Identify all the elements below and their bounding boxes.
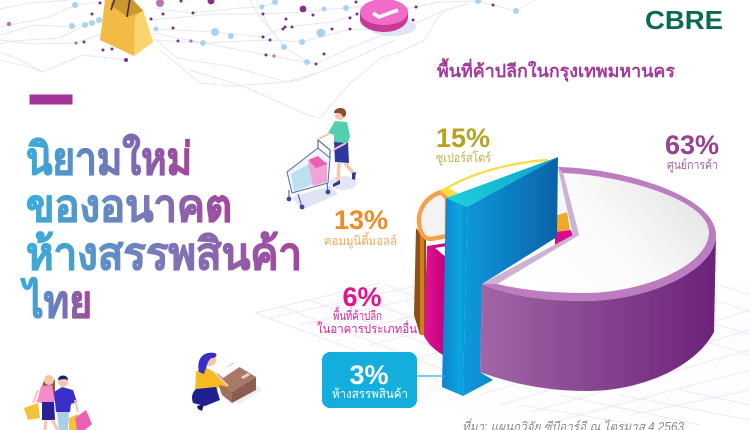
label: 13% community mall: 13% [334, 205, 388, 235]
slice: shopping centre top rim [482, 167, 716, 301]
icon: couple with shopping bags [24, 375, 92, 430]
title: ของอนาคต [26, 182, 232, 231]
pie chart [414, 157, 716, 396]
purple accent bar [30, 94, 72, 104]
title: นิยามใหม่ [26, 133, 192, 184]
label: 6% other retail: ในอาคารประเภทอื่น [317, 320, 417, 336]
label: 13% community mall: คอมมูนิตี้มอลล์ [324, 231, 397, 249]
chart heading: พื้นที่ค้าปลีกในกรุงเทพมหานคร [437, 58, 676, 82]
label: 6% other retail: 6% [342, 282, 382, 312]
label: 15% supermarket: 15% [436, 123, 490, 153]
label: 63% shopping centre: ศูนย์การค้า [667, 158, 718, 173]
icon: woman with shopping cart [287, 108, 357, 210]
slice: other retail (magenta) [424, 243, 447, 357]
background data network lines [0, 0, 535, 118]
callout: 3% department store [322, 352, 445, 408]
label: 6% other retail [317, 282, 417, 336]
label: 63% shopping centre [665, 130, 719, 173]
slice: shopping centre top face [497, 173, 709, 293]
slice: community mall wall (brown) [414, 228, 426, 335]
icon: woman with parcel box [192, 353, 262, 411]
icon: yellow shopping bag [100, 0, 153, 56]
title [20, 133, 302, 327]
label: 6% other retail: พื้นที่ค้าปลีก [333, 306, 382, 323]
floor grid [255, 283, 750, 425]
network dots [7, 0, 519, 66]
slice: community mall top [419, 192, 447, 239]
label: 15% supermarket: ซูเปอร์สโตร์ [436, 150, 491, 166]
label: 13% community mall [324, 205, 397, 249]
slice: department store blue block [463, 157, 558, 396]
slice: shopping centre wall [480, 235, 716, 391]
title: ไทย [20, 276, 92, 327]
title: ห้างสรรพสินค้า [26, 230, 302, 279]
callout: 3% department store: 3% [349, 360, 389, 390]
label: 63% shopping centre: 63% [665, 130, 719, 160]
icon: pink check button [360, 0, 416, 36]
label: 15% supermarket [436, 123, 491, 166]
logo: CBRE: CBRE [645, 5, 723, 35]
callout: 3% department store: ห้างสรรพสินค้า [332, 387, 408, 401]
slice: supermarket top [441, 160, 548, 192]
